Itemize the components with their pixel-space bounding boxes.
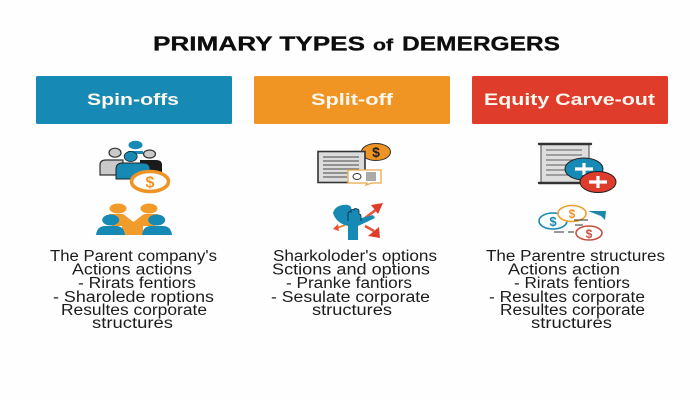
icon: document with coin: $ [372,144,380,160]
text block: Equity Carve-out: Resultes corporate [500,302,645,319]
icon: coins with arrow: $ [549,214,557,229]
text block: Spin-offs: The Parent company's [50,248,217,265]
icon: document with plus badges [539,144,616,192]
text block: Split-off: - Sesulate corporate [271,289,430,306]
panel: Spin-offs header [36,76,232,124]
icon: shareholders with dollar coin [100,141,168,192]
text block: Spin-offs: structures [92,315,173,332]
title: DEMERGERS [402,32,560,56]
text block: Equity Carve-out: Actions action [508,262,620,278]
text block: Split-off: structures [312,302,392,319]
text block: Split-off: - Pranke fantiors [286,275,412,292]
title: PRIMARY TYPES [153,32,365,56]
text block: Equity Carve-out: - Resultes corporate [489,289,645,306]
icon: coins with arrow [539,206,606,241]
text block: Spin-offs: - Rirats fentiors [78,275,196,292]
text block: Equity Carve-out [486,248,665,332]
text block: Spin-offs [50,248,217,332]
icon: hand with arrows [333,203,383,240]
icon: shareholders with dollar coin: $ [146,174,155,192]
icon: coins with arrow: $ [569,207,576,221]
panel: Equity Carve-out header [472,76,668,124]
icon: coins with arrow: $ [586,227,593,241]
icon: document with coin [318,144,390,185]
text block: Split-off: Sharkoloder's options [273,248,437,265]
panel: Split-off header: Split-off [311,90,393,109]
text block: Split-off [271,248,437,319]
text block: Spin-offs: - Sharolede roptions [53,289,214,306]
panel: Equity Carve-out header: Equity Carve-out [484,90,655,109]
text block: Spin-offs: Actions actions [72,262,192,278]
text block: Split-off: Sctions and options [272,262,430,278]
text block: Equity Carve-out: structures [531,315,612,332]
text block: Equity Carve-out: The Parentre structures [486,248,665,265]
text block: Equity Carve-out: - Rirats fentiors [514,275,630,292]
panel: Spin-offs header: Spin-offs [87,90,179,109]
text block: Spin-offs: Resultes corporate [61,302,207,319]
title: of [373,36,394,54]
icon: group of people [96,204,172,235]
title [153,32,560,56]
panel: Split-off header [254,76,450,124]
